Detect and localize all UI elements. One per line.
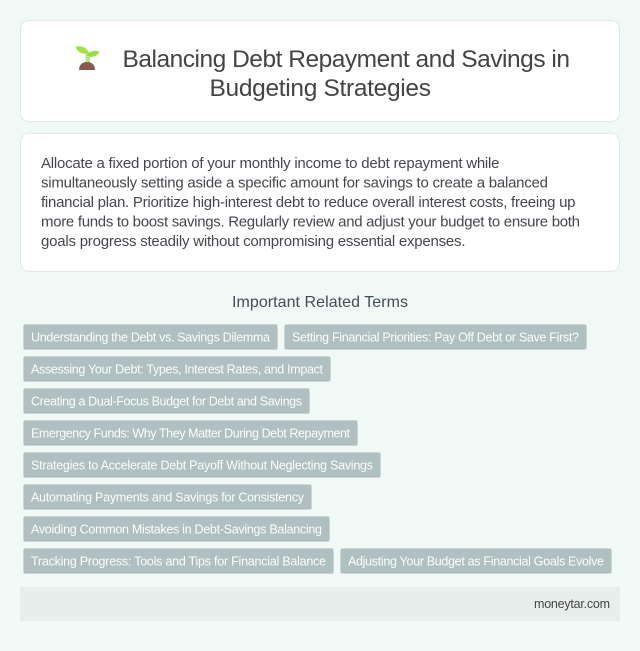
tag 2: Setting Financial Priorities: Pay Off Debt or Save First? [292,330,579,344]
tag 8: Avoiding Common Mistakes in Debt-Savings Balancing [31,522,322,536]
tag 3 [24,356,330,382]
panel: header card [20,20,620,122]
summary text: more funds to boost savings. Regularly review and adjust your budget to ensure both [41,214,580,230]
summary text [41,155,580,250]
tag 5 [24,420,358,446]
tag 9: Tracking Progress: Tools and Tips for Financial Balance [31,554,326,568]
summary text: simultaneously setting aside a specific amount for savings to create a balanced [41,174,548,192]
tag 8 [24,516,330,542]
tag 9 [24,548,334,574]
tag list [24,324,612,574]
title [122,46,570,102]
tag 7: Automating Payments and Savings for Consistency [31,490,305,504]
summary text: Allocate a fixed portion of your monthly income to debt repayment while [41,155,500,172]
summary text: financial plan. Prioritize high-interest debt to reduce overall interest costs, freeing up [41,194,576,211]
tag 5: Emergency Funds: Why They Matter During Debt Repayment [31,426,351,440]
tag 10 [340,548,612,574]
footer [20,587,620,621]
panel: summary card [20,134,620,272]
summary text: goals progress steadily without compromising essential expenses. [41,233,466,250]
title: Budgeting Strategies [210,75,431,102]
title: Balancing Debt Repayment and Savings in [122,46,570,73]
tag 1: Understanding the Debt vs. Savings Dilemma [31,330,270,344]
tag 10: Adjusting Your Budget as Financial Goals Evolve [348,554,604,568]
tag 7 [24,484,312,510]
tag 4: Creating a Dual-Focus Budget for Debt and Savings [31,394,302,408]
footer: moneytar.com [534,597,610,611]
tag 1 [24,324,278,350]
tag 2 [284,324,586,350]
tag 6: Strategies to Accelerate Debt Payoff Without Neglecting Savings [31,458,373,472]
heading: important related terms: Important Related Terms [232,294,408,311]
icon: seedling [76,46,99,70]
tag 3: Assessing Your Debt: Types, Interest Rates, and Impact [31,362,324,376]
tag 4 [24,388,310,414]
tag 6 [24,452,380,478]
